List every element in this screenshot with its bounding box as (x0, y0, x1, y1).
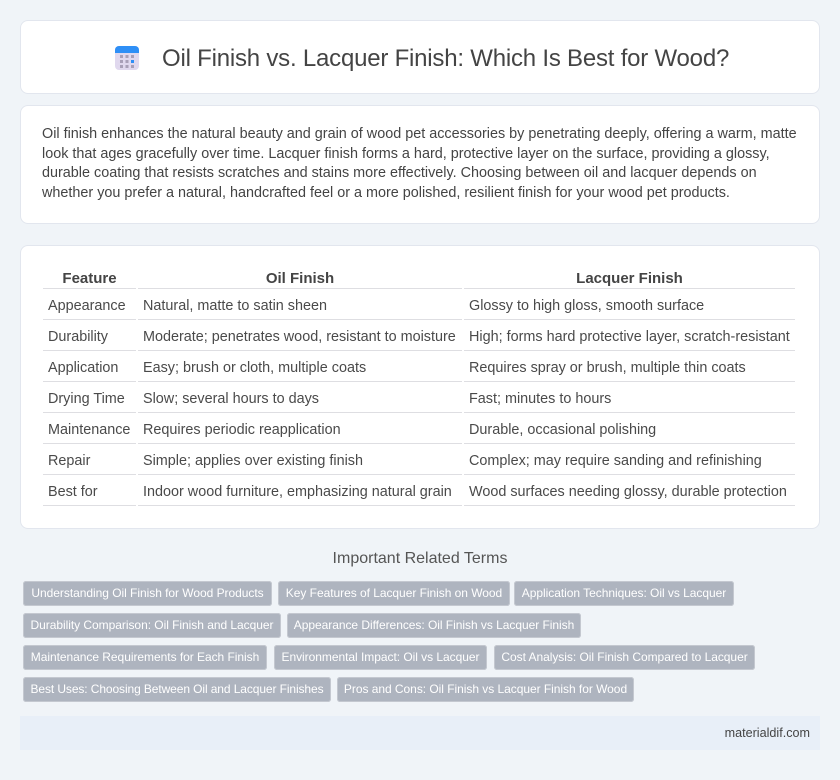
tag (494, 645, 755, 670)
tag: Appearance Differences: Oil Finish vs Lacquer Finish (294, 618, 574, 632)
tag: Best Uses: Choosing Between Oil and Lacquer Finishes (31, 682, 323, 696)
row: best for: Wood surfaces needing glossy, durable protection (469, 484, 787, 500)
row: durability: Durability (48, 329, 108, 345)
header row (43, 270, 795, 289)
row: maintenance: Durable, occasional polishing (469, 422, 656, 438)
row: application: Requires spray or brush, multiple thin coats (469, 360, 746, 376)
panel: intro text (20, 105, 820, 224)
row: maintenance: Maintenance (48, 422, 130, 438)
tag: Maintenance Requirements for Each Finish (31, 650, 259, 664)
row: repair: Repair (48, 453, 90, 469)
row: drying time: Slow; several hours to days (143, 391, 319, 407)
tag (274, 645, 487, 670)
row: maintenance (43, 422, 795, 444)
row: repair: Complex; may require sanding and refinishing (469, 453, 762, 469)
panel: comparison table (20, 245, 820, 529)
intro paragraph (42, 126, 797, 201)
tag (514, 581, 734, 606)
row: drying time: Fast; minutes to hours (469, 391, 611, 407)
row: application: Application (48, 360, 118, 376)
row: best for (43, 484, 795, 506)
tag (23, 677, 331, 702)
row: best for: Indoor wood furniture, emphasizing natural grain (143, 484, 452, 500)
header row: Oil Finish (266, 270, 334, 287)
tag: Application Techniques: Oil vs Lacquer (522, 586, 726, 600)
panel: title header (20, 20, 820, 94)
comparison table (43, 270, 795, 506)
header row: Feature (62, 270, 117, 287)
row: durability: Moderate; penetrates wood, resistant to moisture (143, 329, 456, 345)
intro paragraph: durable coating that resists scratches and stains more effectively. Choosing between oil and lacquer depends on (42, 165, 757, 181)
row: drying time: Drying Time (48, 391, 125, 407)
row: application (43, 360, 795, 382)
tag: Pros and Cons: Oil Finish vs Lacquer Finish for Wood (344, 682, 627, 696)
row: durability (43, 329, 795, 351)
tag: Durability Comparison: Oil Finish and Lacquer (30, 618, 273, 632)
icon: calendar (115, 46, 139, 70)
tag: Cost Analysis: Oil Finish Compared to Lacquer (501, 650, 748, 664)
row: maintenance: Requires periodic reapplication (143, 422, 341, 438)
tag list (23, 581, 755, 702)
intro paragraph: Oil finish enhances the natural beauty and grain of wood pet accessories by penetrating deeply, offering a warm, matte (42, 126, 797, 142)
tag: Environmental Impact: Oil vs Lacquer (282, 650, 479, 664)
tag (278, 581, 510, 606)
tag: Understanding Oil Finish for Wood Products (31, 586, 264, 600)
intro paragraph: whether you prefer a natural, handcrafted feel or a more polished, resilient finish for your wood pet products. (42, 185, 730, 201)
row: repair (43, 453, 795, 475)
intro paragraph: look that ages gracefully over time. Lacquer finish forms a hard, protective layer on the surface, providing a glossy, (42, 146, 770, 162)
footer bar (20, 716, 820, 750)
row: appearance (43, 298, 795, 320)
row: drying time (43, 391, 795, 413)
tag (23, 613, 281, 638)
header row: Lacquer Finish (576, 270, 683, 287)
row: appearance: Natural, matte to satin sheen (143, 298, 327, 314)
row: appearance: Appearance (48, 298, 126, 314)
tag: Key Features of Lacquer Finish on Wood (286, 586, 502, 600)
tag (337, 677, 634, 702)
row: application: Easy; brush or cloth, multiple coats (143, 360, 366, 376)
row: repair: Simple; applies over existing finish (143, 453, 363, 469)
row: best for: Best for (48, 484, 98, 500)
tag (287, 613, 581, 638)
title: Oil Finish vs. Lacquer Finish: Which Is Best for Wood? (162, 45, 729, 72)
tag (23, 645, 267, 670)
heading: related terms: Important Related Terms (333, 550, 507, 567)
row: appearance: Glossy to high gloss, smooth surface (469, 298, 704, 314)
row: durability: High; forms hard protective layer, scratch-resistant (469, 329, 790, 345)
footer source: materialdif.com (725, 726, 810, 740)
tag (23, 581, 272, 606)
